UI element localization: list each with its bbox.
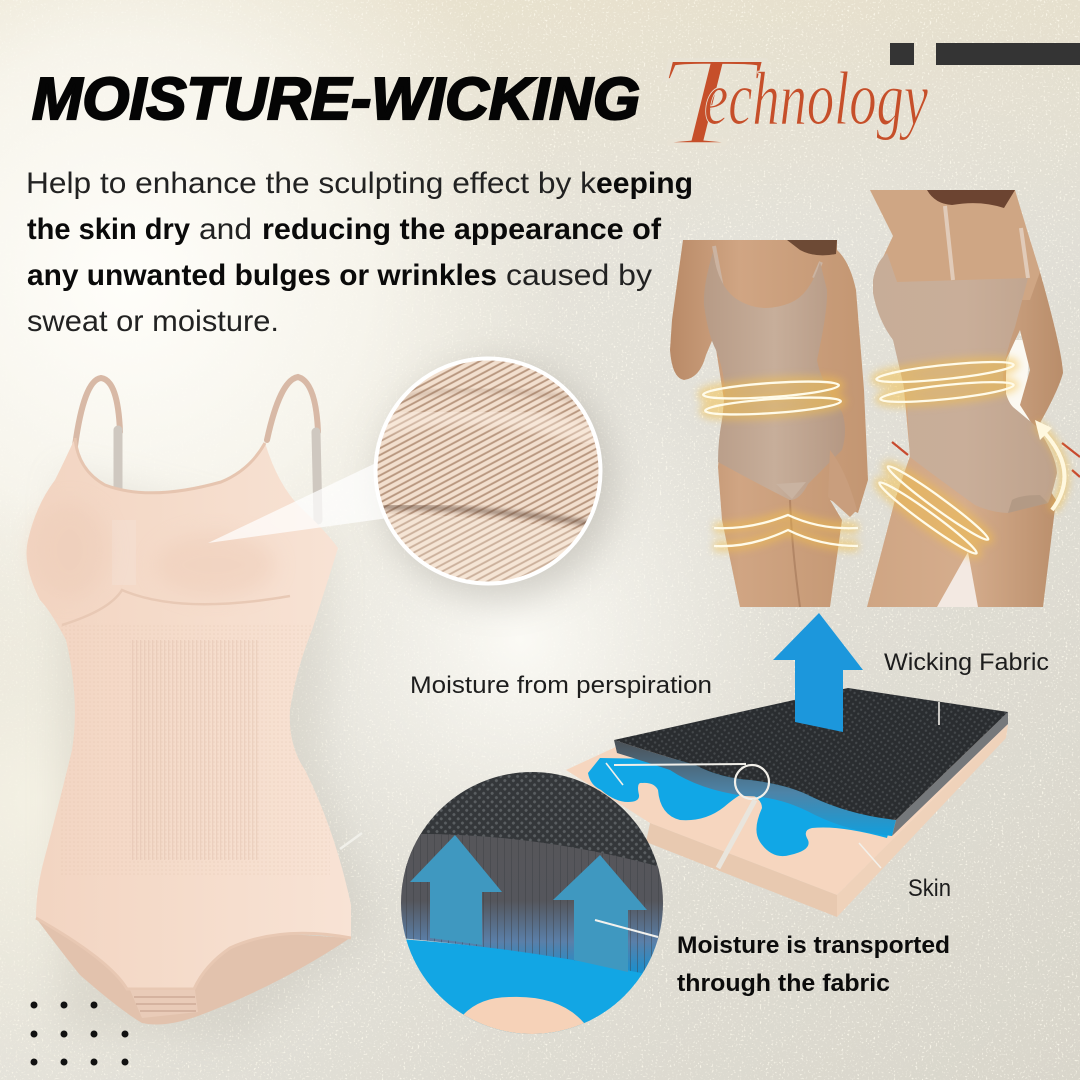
- fabric top: [614, 688, 1008, 820]
- label: moisture from perspiration: Moisture from perspiration: [410, 672, 712, 699]
- leg crease: [790, 500, 800, 607]
- callout: magnified lens: [400, 770, 665, 1040]
- skin: [867, 272, 1063, 607]
- magnified arrows: [410, 835, 502, 945]
- description text: and: [199, 213, 252, 246]
- script subtitle: [654, 30, 928, 172]
- label: skin: Skin: [908, 875, 951, 902]
- knit fabric layer: [400, 770, 665, 870]
- skin dome: [464, 996, 584, 1034]
- hand: [828, 450, 857, 517]
- gap glow between arm and body: [1006, 340, 1030, 420]
- label: moisture transported: through the fabric: [677, 970, 890, 997]
- bodysuit front: [26, 438, 351, 989]
- dot grid: [30, 1002, 128, 1066]
- skin layer: [566, 725, 1008, 895]
- knit texture: [62, 626, 330, 874]
- description text: [26, 167, 693, 338]
- description text: sweat or moisture.: [27, 305, 279, 338]
- bodysuit product photo: [26, 377, 375, 1040]
- script subtitle: echnology: [704, 57, 928, 141]
- description text: the skin dry: [27, 213, 190, 246]
- script subtitle: T: [654, 30, 765, 172]
- suit: [704, 252, 845, 500]
- icon: shoulder straps: [75, 377, 318, 520]
- red accent lines: [892, 442, 1080, 477]
- model: back view: [867, 190, 1063, 607]
- fabric thickness: [892, 712, 1008, 836]
- moisture diagram: [566, 613, 1008, 917]
- bust seam: [62, 590, 290, 625]
- arrow: curved lift arrow: [1035, 420, 1064, 510]
- hair: [927, 190, 1015, 208]
- back panel of bodysuit: [36, 918, 350, 1024]
- description text: eeping: [596, 167, 693, 200]
- white pointer line on bodysuit: [340, 833, 362, 849]
- fibres layer: [400, 834, 664, 980]
- skin: [670, 240, 868, 607]
- straps: [714, 246, 821, 288]
- blue moisture layer: [406, 940, 642, 1034]
- description text: any unwanted bulges or wrinkles: [27, 259, 497, 292]
- gold compression rings: [703, 358, 1064, 558]
- pointer beam: [208, 462, 388, 543]
- description text: Help to enhance the sculpting effect by k: [26, 167, 597, 200]
- straps: [945, 206, 1028, 280]
- label: wicking fabric: Wicking Fabric: [884, 649, 1049, 676]
- callout: fabric close-up: [208, 355, 616, 600]
- leg gap: [937, 552, 978, 607]
- neckline and leg binding: [75, 438, 265, 493]
- leader lines: [606, 702, 939, 868]
- label: moisture transported: Moisture is transported: [677, 932, 950, 959]
- title: MOISTURE-WICKING: [32, 66, 640, 132]
- description text: reducing the appearance of: [262, 213, 662, 246]
- water: [588, 758, 892, 856]
- suit: [873, 253, 1057, 513]
- label: moisture transported: [677, 932, 950, 997]
- hair: [787, 240, 837, 255]
- model: front view: [670, 240, 868, 607]
- decorative bars: [890, 43, 1080, 65]
- arrow: blue upward: [773, 613, 863, 732]
- description text: caused by: [506, 259, 652, 292]
